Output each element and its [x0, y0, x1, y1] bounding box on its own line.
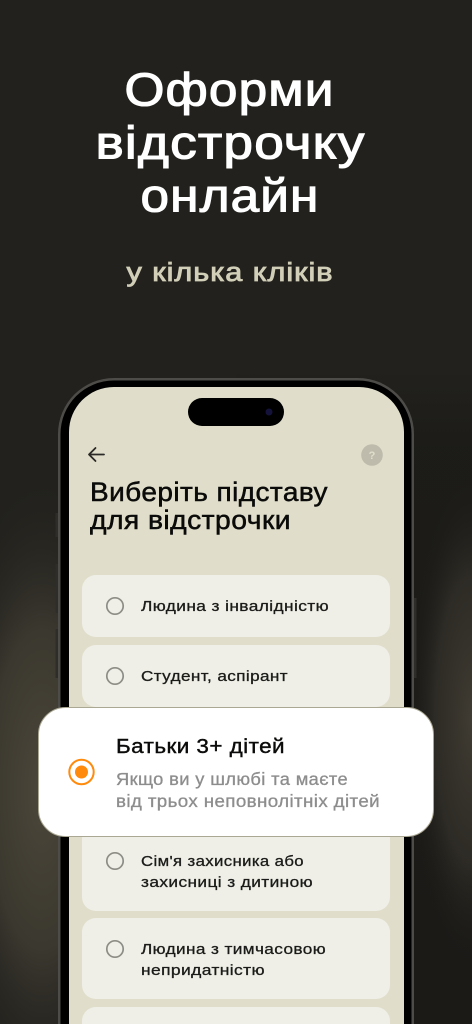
option: temporary unfitness: Людина з тимчасовою — [141, 941, 326, 958]
option: temporary unfitness — [82, 918, 390, 999]
selected option card — [38, 708, 434, 836]
option: temporary unfitness: непридатністю — [141, 962, 265, 979]
screen heading: для відстрочки — [90, 505, 291, 535]
option heading: Батьки 3+ дітей — [116, 736, 285, 758]
title — [96, 64, 366, 222]
option description: Якщо ви у шлюбі та маєте — [116, 769, 348, 789]
icon: back arrow — [89, 448, 104, 461]
title: Оформи — [124, 64, 334, 116]
phone screen — [69, 387, 404, 1024]
option: defender family — [82, 825, 390, 911]
option: defender family: Сім'я захисника або — [141, 853, 304, 870]
subtitle: у кілька кліків — [126, 259, 334, 287]
option: defender family: захисниці з дитиною — [141, 874, 313, 891]
icon: selected radio — [69, 760, 94, 784]
dynamic island — [188, 398, 284, 426]
screen heading: Виберіть підставу — [90, 477, 328, 507]
option description: від трьох неповнолітніх дітей — [116, 791, 380, 811]
option: disability: Людина з інвалідністю — [141, 598, 329, 615]
title: онлайн — [140, 170, 320, 222]
option: partially visible — [82, 1007, 390, 1024]
option description — [116, 769, 380, 811]
title: відстрочку — [96, 116, 366, 168]
screen heading — [90, 477, 328, 535]
option: student: Студент, аспірант — [141, 668, 288, 685]
icon: help — [361, 444, 383, 466]
phone — [56, 378, 416, 1024]
option: student — [82, 645, 390, 707]
option: disability — [82, 575, 390, 637]
icon: help: ? — [369, 450, 376, 462]
